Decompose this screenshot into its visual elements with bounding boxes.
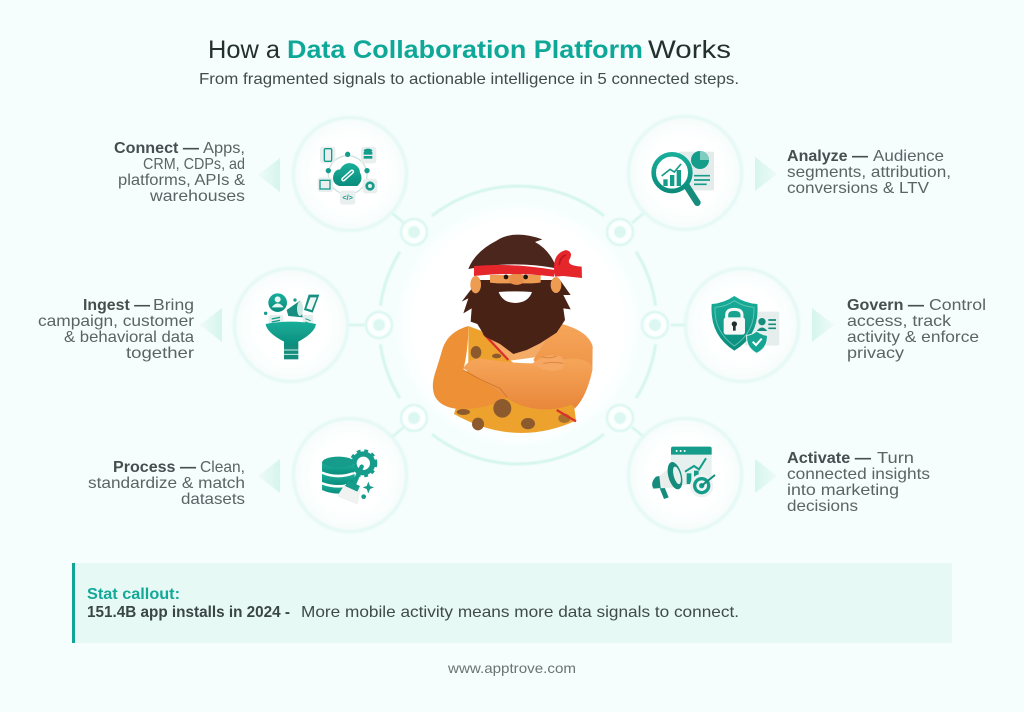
text: process: Clean, [200,459,245,476]
text: connect: warehouses [149,188,245,205]
central hub rings and connectors [347,186,690,464]
step circle: govern [686,268,798,382]
arrow: govern [812,308,834,342]
text: activate: Turn [877,450,914,467]
text: ingest: Bring [153,297,194,314]
subtitle: From fragmented signals to actionable intelligence in 5 connected steps. [199,71,739,88]
step circle: activate [628,418,742,532]
icon: connected cloud: </> [342,193,353,202]
hub node: upper right [607,219,633,245]
text: govern: activity & enforce [847,329,979,346]
text: govern [847,297,986,362]
text: connect [114,140,245,205]
text: ingest: Ingest — [83,297,150,314]
mascot: bearded caveman [433,235,593,433]
step circle: analyze [628,116,742,230]
text: ingest: campaign, customer [38,313,195,330]
text: govern: Govern — [847,297,924,314]
text: analyze: Analyze — [787,148,868,165]
step: connect [114,118,406,230]
text: analyze [787,148,951,197]
text: connect: Apps, [203,140,245,157]
hub node: left [366,312,392,338]
text: govern: privacy [847,345,904,362]
text: process: standardize & match [88,475,245,492]
text: connect: Connect — [114,140,199,157]
text: activate: decisions [787,498,858,515]
text: process: datasets [181,491,245,508]
icon: connected cloud [318,147,377,205]
step: govern [686,268,986,382]
arrow: process [258,459,280,493]
icon: data funnel [264,293,319,359]
text: activate: connected insights [787,466,930,483]
step: analyze [628,116,951,230]
text: govern: access, track [847,313,952,330]
callout body [87,604,739,621]
callout heading: Stat callout: [87,586,180,603]
text: connect: CRM, CDPs, ad [143,156,245,173]
step circle: ingest [234,268,348,382]
arrow: connect [258,158,280,192]
hub node: lower right [607,405,633,431]
text: ingest [38,297,195,362]
step: ingest [38,268,348,382]
icon: analytics magnifier [654,151,714,203]
text: connect: platforms, APIs & [118,172,245,189]
title [208,36,731,64]
text: analyze: conversions & LTV [787,180,929,197]
text: activate: into marketing [787,482,899,499]
text: analyze: segments, attribution, [787,164,951,181]
arrow: activate [755,459,777,493]
hub node: lower left [401,405,427,431]
text: activate: Activate — [787,450,871,467]
text: ingest: together [126,345,195,362]
title: How a [208,36,280,64]
arrow: analyze [755,157,777,191]
text: govern: Control [929,297,986,314]
text: process [88,459,245,508]
text: process: Process — [113,459,196,476]
text: analyze: Audience [873,148,944,165]
step circle: connect [294,118,406,230]
icon: privacy shield [711,296,779,353]
step circle: process [294,418,406,532]
hub node: upper left [401,219,427,245]
callout body: 151.4B app installs in 2024 - [87,604,290,621]
icon: database cleanup [322,451,376,504]
step: activate [628,418,930,532]
icon: campaign megaphone [652,447,715,499]
title: Data Collaboration Platform [287,36,643,64]
stat callout panel [72,563,952,643]
text: activate [787,450,930,515]
title: Works [648,36,731,64]
arrow: ingest [200,308,222,342]
step: process [88,418,406,532]
callout body: More mobile activity means more data signals to connect. [301,604,739,621]
hub node: right [642,312,668,338]
footer url: www.apptrove.com [447,660,576,676]
text: ingest: & behavioral data [64,329,194,346]
